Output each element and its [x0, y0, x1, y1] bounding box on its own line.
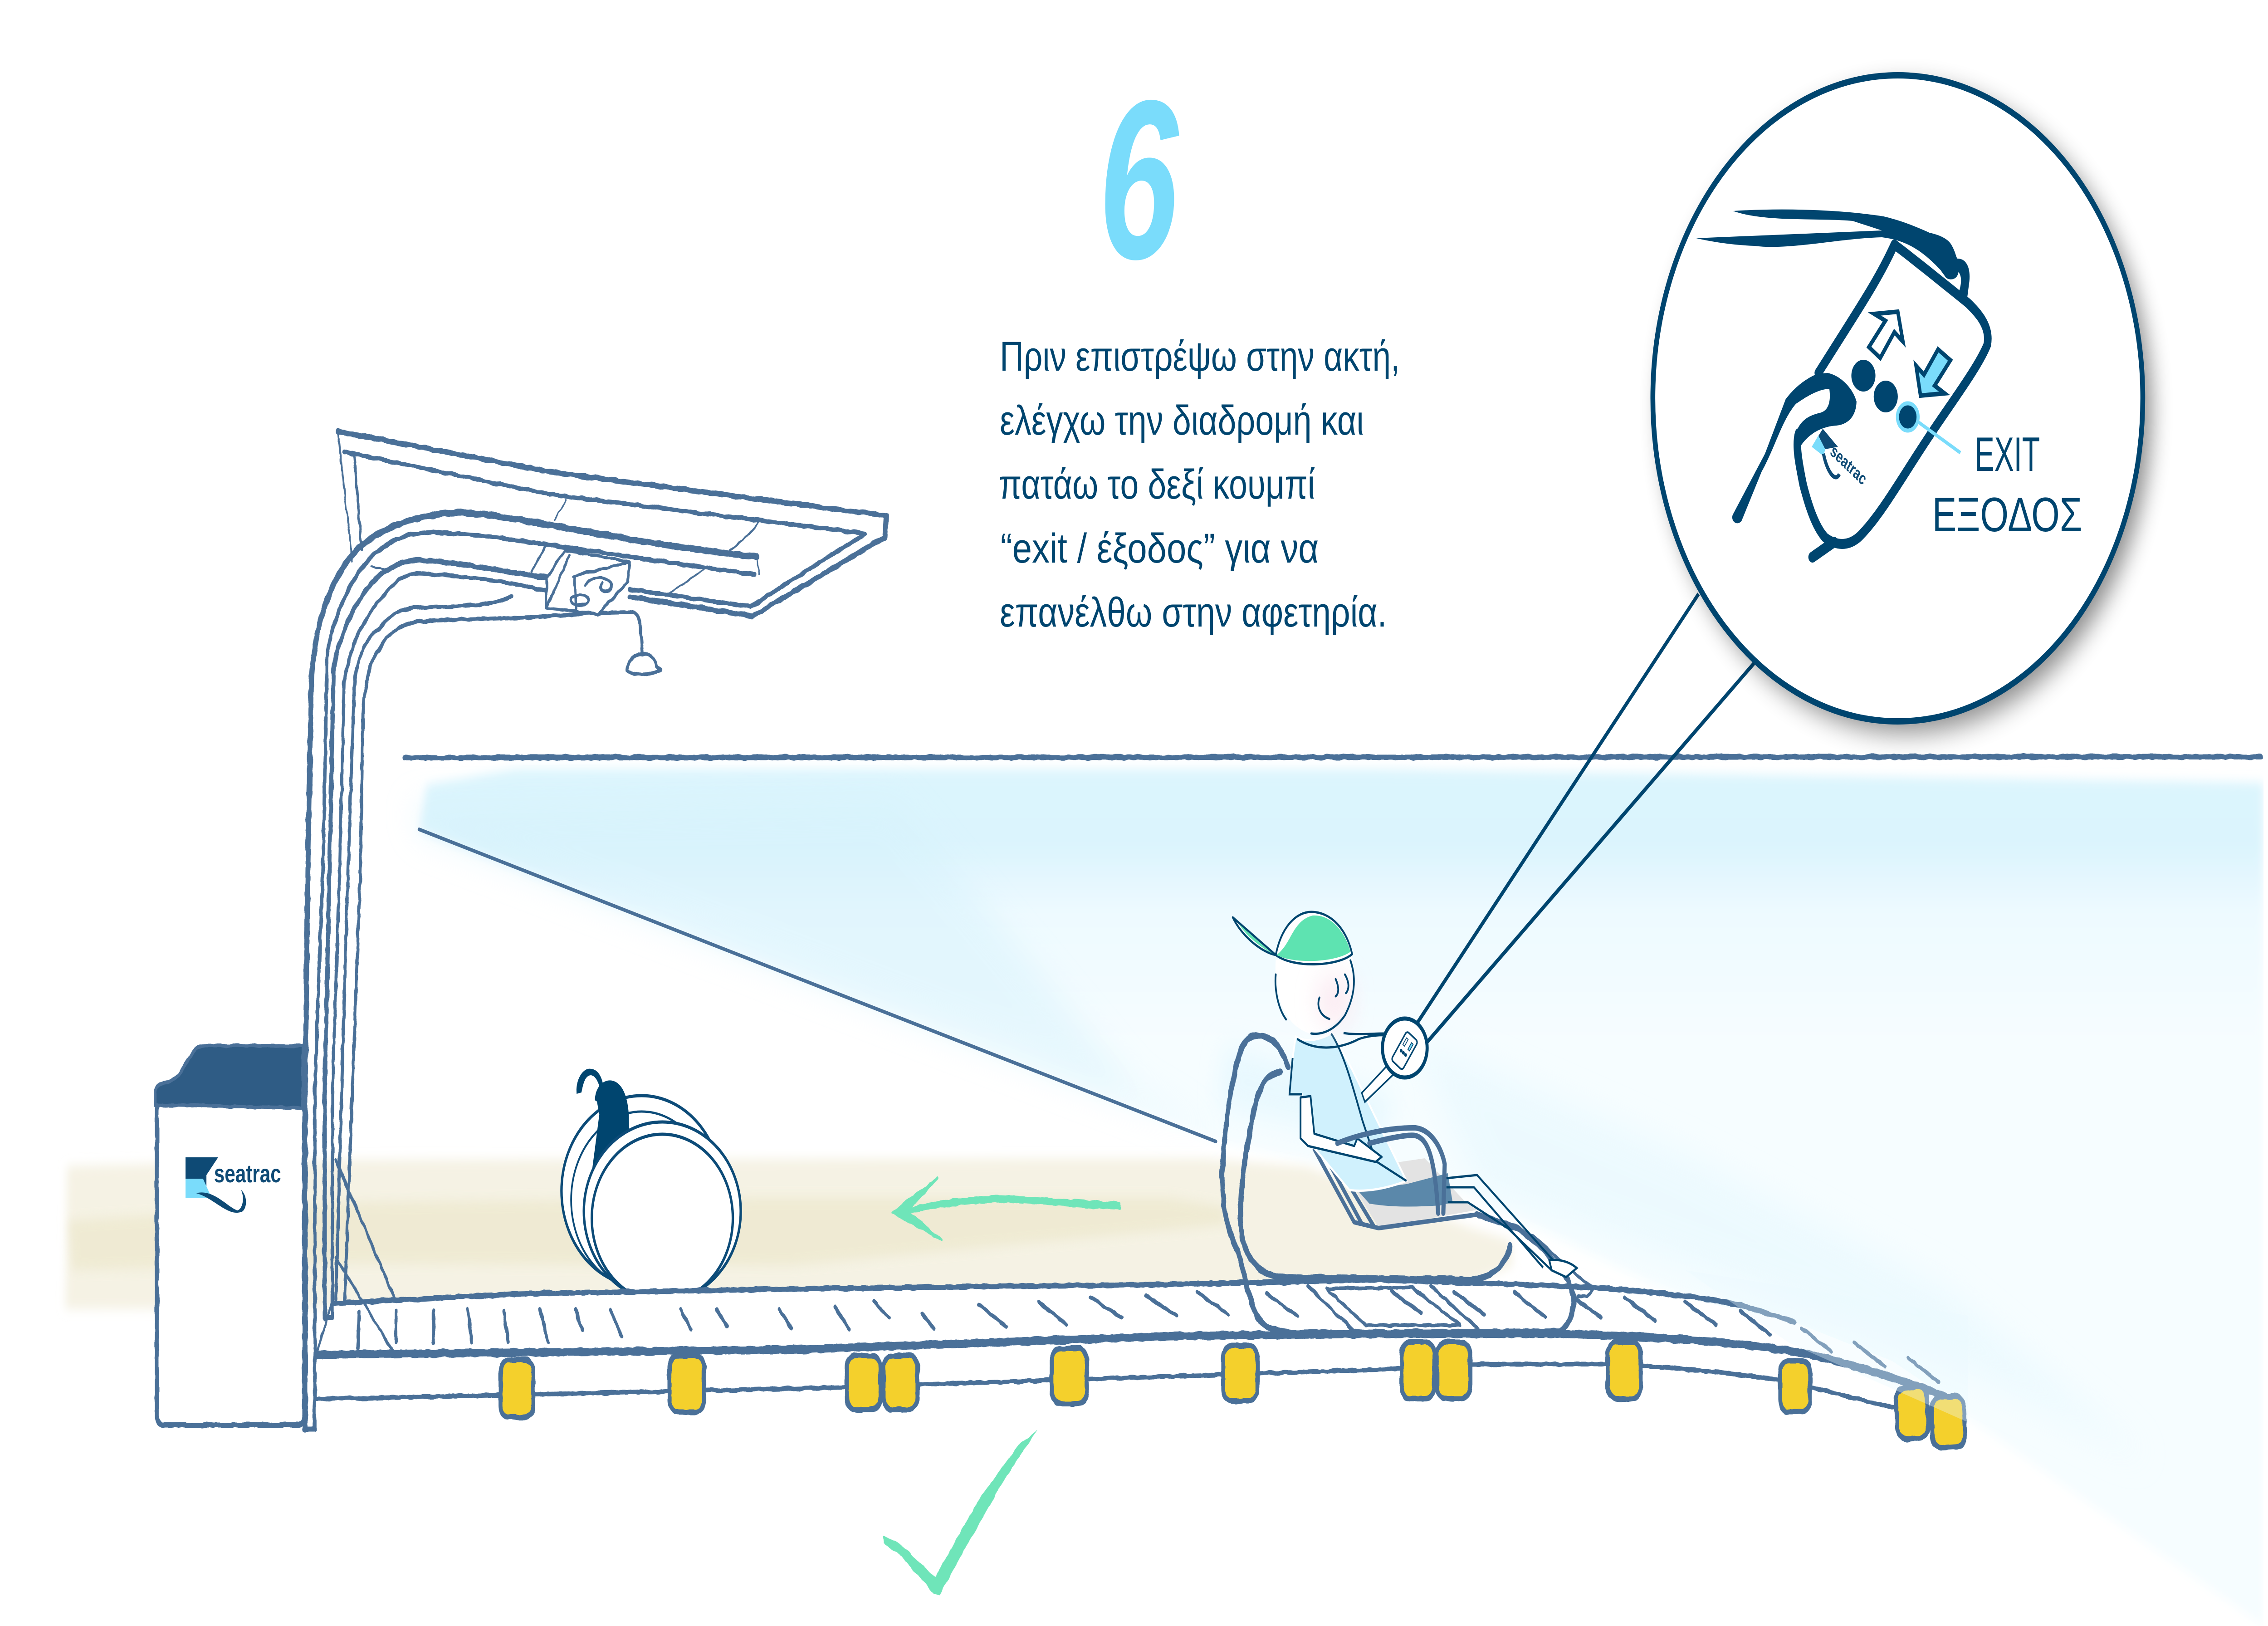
cheek blush [1316, 973, 1354, 1028]
bracket bolt [571, 595, 589, 605]
cabinet seatrac logo [186, 1157, 281, 1213]
connecting lines to magnifier [1417, 594, 1754, 1042]
lower arm [1300, 1096, 1382, 1162]
shirt [1290, 1033, 1407, 1190]
armrest [1337, 1128, 1445, 1213]
sketched structure [155, 431, 2261, 1448]
horizon line [405, 757, 2261, 758]
green direction arrow [892, 1178, 1119, 1240]
head [1276, 956, 1354, 1034]
deck surface [316, 1280, 1945, 1396]
line 5: επανέλθω στην αφετηρία. [1000, 589, 1387, 636]
big number six: 6 [1099, 53, 1179, 307]
carriage bracket [546, 550, 630, 614]
shirt outline [1290, 1033, 1407, 1181]
exodos label: ΕΞΟΔΟΣ [1932, 488, 2082, 542]
scarf cable [1297, 1033, 1410, 1048]
seat chair outline [1222, 1035, 1593, 1333]
sand beach [65, 1159, 1512, 1309]
legs [1447, 1175, 1557, 1270]
down arrow button [1916, 349, 1950, 396]
remote logo: seatrac [1828, 441, 1870, 489]
canopy solar panel [338, 431, 886, 616]
exit label: EXIT [1975, 427, 2040, 482]
line 4: “exit / έξοδος” για να [1001, 525, 1319, 572]
magnifier circle [1653, 75, 2151, 733]
remote logo [1812, 429, 1870, 489]
logo square [186, 1157, 218, 1186]
wheelchair handle [577, 1069, 630, 1183]
electric cabinet [155, 1046, 304, 1425]
background water [410, 769, 2263, 1626]
child on seatrac chair [1233, 912, 1577, 1277]
back wheel [562, 1096, 722, 1288]
shoe [1549, 1260, 1577, 1277]
mini remote [1391, 1031, 1418, 1070]
exit pointer [1919, 422, 1960, 453]
cord tail [1813, 542, 1834, 557]
line 1: Πριν επιστρέψω στην ακτή, [1000, 333, 1400, 380]
cap brim [1233, 917, 1276, 955]
water wash over deck end [1686, 1270, 1968, 1422]
face lines [1276, 960, 1354, 1034]
hanging hand control [627, 654, 661, 674]
deck ticks [358, 1291, 1938, 1381]
exit button [1897, 403, 1918, 431]
green cap [1233, 912, 1352, 964]
seat back lines [1311, 1097, 1477, 1228]
instruction text [999, 333, 1400, 636]
hand [1732, 373, 1857, 523]
logo light block [186, 1179, 211, 1198]
remote control body [1797, 245, 1988, 544]
cabinet lid [155, 1046, 303, 1108]
bracket spiral [585, 578, 611, 591]
middle button [1874, 381, 1898, 412]
shadow [1662, 87, 2151, 733]
raised arm [1362, 1057, 1402, 1102]
logo text: seatrac [214, 1159, 281, 1188]
front wheel [584, 1122, 741, 1302]
logo wave [196, 1190, 246, 1213]
seat cushion [1355, 1158, 1477, 1227]
remote control cables [1696, 210, 1970, 297]
post ties [316, 1160, 395, 1354]
lens [1653, 75, 2143, 721]
shorts [1357, 1173, 1452, 1207]
curved post tubes [305, 513, 757, 1429]
line 3: πατάω το δεξί κουμπί [999, 461, 1315, 508]
deck rails [316, 1280, 1945, 1409]
shoreline [419, 829, 1216, 1141]
green check mark [884, 1429, 1037, 1595]
yellow deck floats [501, 1342, 1966, 1448]
small magnifier in hand [1383, 1019, 1427, 1077]
left button [1851, 360, 1876, 392]
parked wheelchair [562, 1069, 741, 1302]
line 2: ελέγχω την διαδρομή και [1000, 397, 1364, 444]
up arrow button [1869, 312, 1903, 358]
